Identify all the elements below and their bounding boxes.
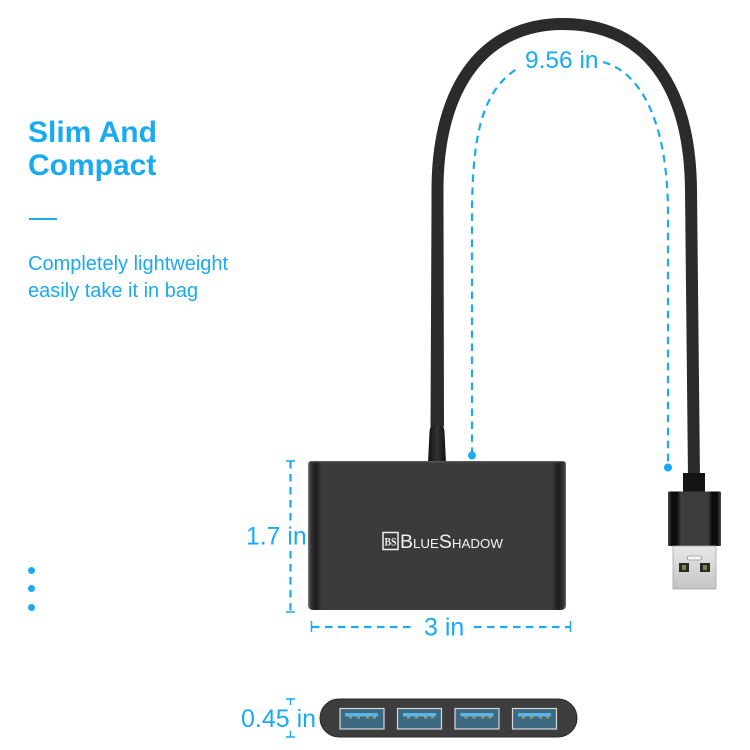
USB-A plug [668,473,721,589]
USB port 1 [340,708,384,729]
USB hub body [308,461,566,610]
USB cable [430,24,694,478]
USB port 3 [455,708,499,729]
cable length label: 9.56 in [525,47,599,74]
title: Compact [28,149,156,182]
width dimension: 3 in [424,614,464,642]
pagination dots [28,567,35,611]
height dimension: 1.7 in [246,524,307,550]
USB port 4 [512,708,556,729]
brand logo: BS [384,534,397,548]
cable strain relief [428,425,446,463]
title: Slim And [28,116,157,149]
description text [28,253,228,302]
width dimension [312,614,570,642]
height dimension [246,461,307,612]
description text: easily take it in bag [28,280,198,302]
brand logo: BlueShadow [400,532,504,553]
hub port side view [320,699,577,737]
cable length dashed line [468,62,672,472]
accent line [29,218,57,220]
description text: Completely lightweight [28,253,228,275]
USB port 2 [398,708,442,729]
depth dimension: 0.45 in [241,705,316,733]
title [28,116,157,182]
